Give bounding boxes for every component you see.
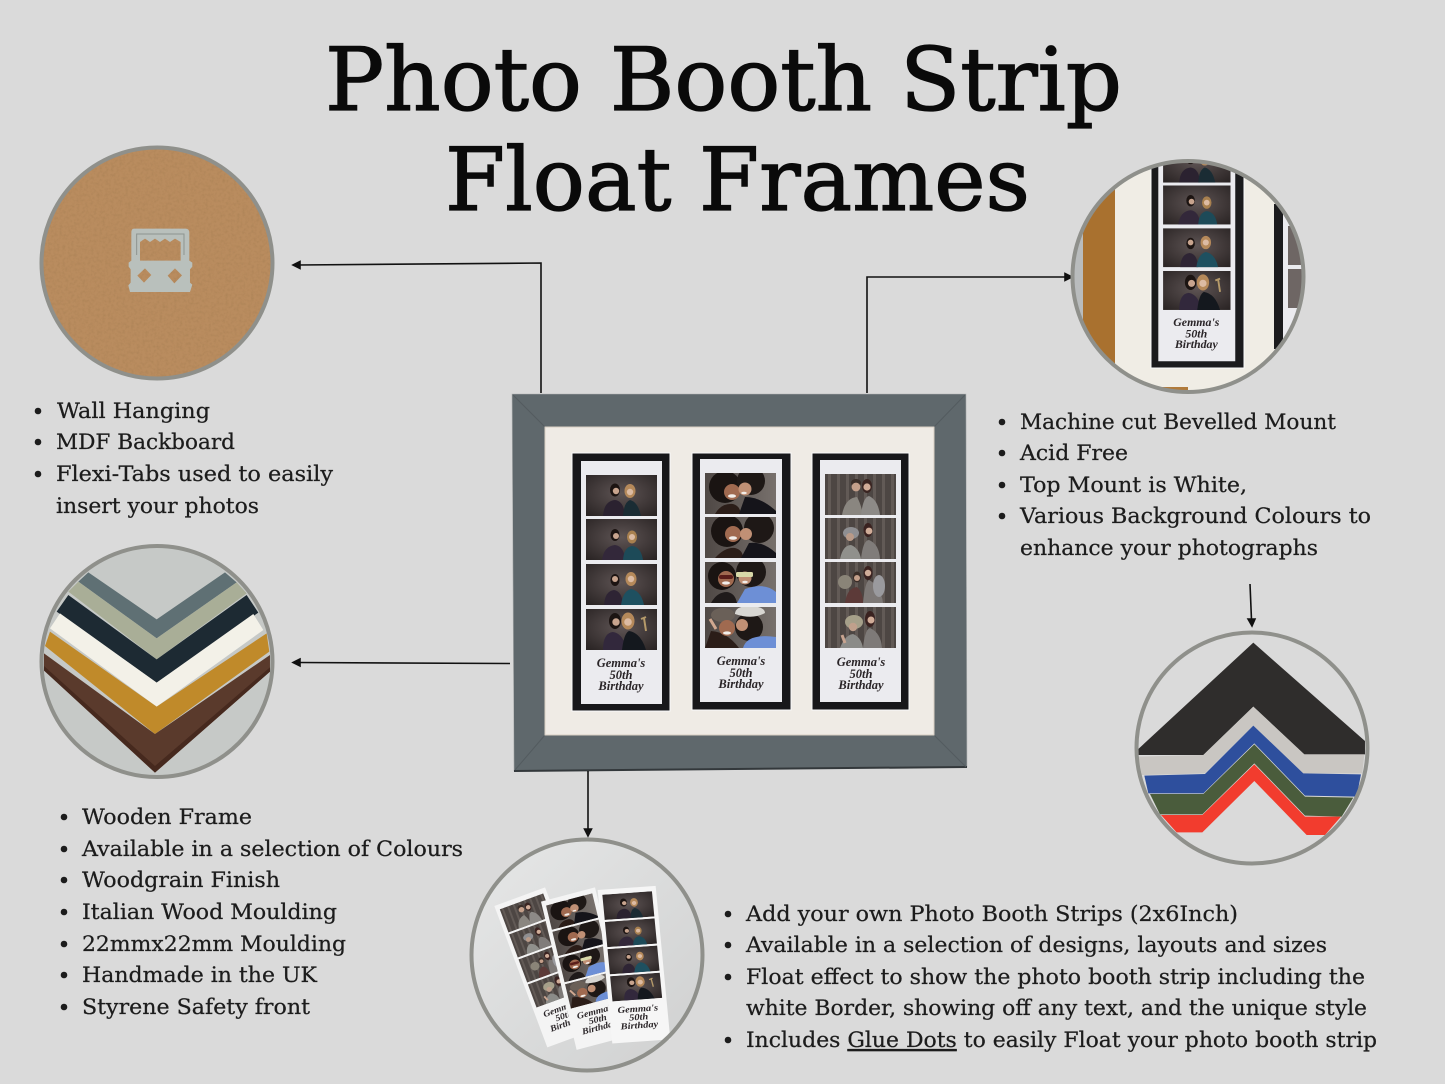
photo strip: middle: 50th	[730, 666, 753, 680]
photo strip: middle: Birthday	[717, 677, 764, 691]
close-up contents	[1074, 163, 1302, 390]
photo booth strip feature list	[725, 902, 1377, 1053]
arrow: frame to mount detail circle	[867, 274, 1072, 393]
icon: mount colours circle	[1136, 632, 1368, 864]
loose strip: back: 50th	[554, 1009, 574, 1024]
photo strip: left: Gemma's	[597, 656, 645, 670]
photo strip: right: Gemma's	[837, 655, 885, 669]
title: Photo Booth Strip	[325, 29, 1122, 131]
icon: backboard circle with hanger	[42, 148, 272, 378]
mount window: left	[572, 453, 670, 711]
photo strip: right: 50th	[850, 667, 873, 681]
wall hanging feature list: insert your photos	[56, 494, 259, 519]
arrow: frame to wall hanging circle	[293, 262, 541, 393]
mount feature list: Machine cut Bevelled Mount	[1020, 410, 1336, 435]
photo booth strip feature list: white Border, showing off any text, and the unique style	[746, 996, 1367, 1021]
arrow: frame to strips circle	[584, 771, 592, 836]
title	[325, 29, 1122, 231]
photo strip: left: 50th	[610, 668, 633, 682]
photo strip: left: Birthday	[597, 679, 644, 693]
icon: bevelled mount close-up circle	[1070, 159, 1306, 394]
arrow: mount text to mount colours circle	[1248, 584, 1255, 626]
central photo frame	[512, 394, 967, 771]
photo strip: middle: Gemma's	[717, 654, 765, 668]
close-up contents: 50th	[1185, 326, 1207, 340]
photo booth strip feature list: Available in a selection of designs, layouts and sizes	[745, 933, 1327, 958]
loose strip: middle	[541, 887, 631, 1050]
mount window: middle	[692, 453, 791, 710]
wall hanging feature list	[35, 399, 334, 519]
loose photo strips	[494, 886, 670, 1050]
loose strip: front: Gemma's	[617, 1003, 659, 1016]
icon: wall hanging tab	[128, 229, 192, 292]
frame moulding	[512, 394, 967, 771]
mount feature list: enhance your photographs	[1020, 536, 1318, 561]
mount board	[545, 427, 934, 735]
close-up contents: Gemma's	[1173, 315, 1220, 329]
photo strip: middle	[700, 459, 782, 702]
wooden frame feature list: Handmade in the UK	[82, 963, 318, 988]
loose strip: front: Birthday	[619, 1019, 659, 1032]
photo booth strip feature list: Float effect to show the photo booth strip including the	[746, 965, 1365, 990]
wooden frame feature list	[61, 805, 463, 1020]
wooden frame feature list: Available in a selection of Colours	[81, 837, 463, 862]
mount colour chevrons	[1138, 643, 1365, 835]
title: Float Frames	[445, 129, 1030, 231]
icon: moulding colour samples circle	[42, 546, 272, 777]
close-up contents: Birthday	[1174, 337, 1218, 351]
wooden frame feature list: Italian Wood Moulding	[82, 900, 337, 925]
arrow: frame to moulding circle	[293, 659, 510, 666]
loose strip: middle: Birthday	[580, 1018, 619, 1038]
loose strip: middle: 50th	[588, 1012, 608, 1027]
mount window: right	[812, 453, 909, 710]
photo strip: left	[581, 461, 662, 704]
wooden frame feature list: 22mmx22mm Moulding	[82, 932, 346, 957]
wooden frame feature list: Wooden Frame	[82, 805, 252, 830]
icon: photo strips circle	[472, 840, 702, 1070]
wall hanging feature list: Flexi-Tabs used to easily	[56, 462, 334, 487]
loose strip: middle: Gemma's	[576, 1002, 616, 1022]
photo strip: right	[820, 460, 901, 702]
wooden frame feature list: Woodgrain Finish	[82, 868, 280, 893]
loose strip: back	[494, 887, 598, 1047]
wall hanging feature list: Wall Hanging	[57, 399, 210, 424]
photo strip: right: Birthday	[837, 678, 884, 692]
mount feature list: Various Background Colours to	[1019, 504, 1371, 529]
moulding chevrons	[44, 572, 270, 773]
loose strip: back: Gemma's	[542, 998, 581, 1020]
mount feature list: Top Mount is White,	[1020, 473, 1247, 498]
mount feature list: Acid Free	[1019, 441, 1128, 466]
photo booth strip feature list: Includes Glue Dots to easily Float your photo booth strip	[746, 1028, 1377, 1053]
loose strip: front	[598, 886, 670, 1043]
loose strip: front: 50th	[629, 1012, 649, 1023]
photo booth strip feature list: Add your own Photo Booth Strips (2x6Inch)	[745, 902, 1238, 927]
loose strip: back: Birthday	[548, 1013, 586, 1035]
mount feature list	[999, 410, 1371, 561]
wall hanging feature list: MDF Backboard	[56, 430, 235, 455]
wooden frame feature list: Styrene Safety front	[82, 995, 310, 1020]
